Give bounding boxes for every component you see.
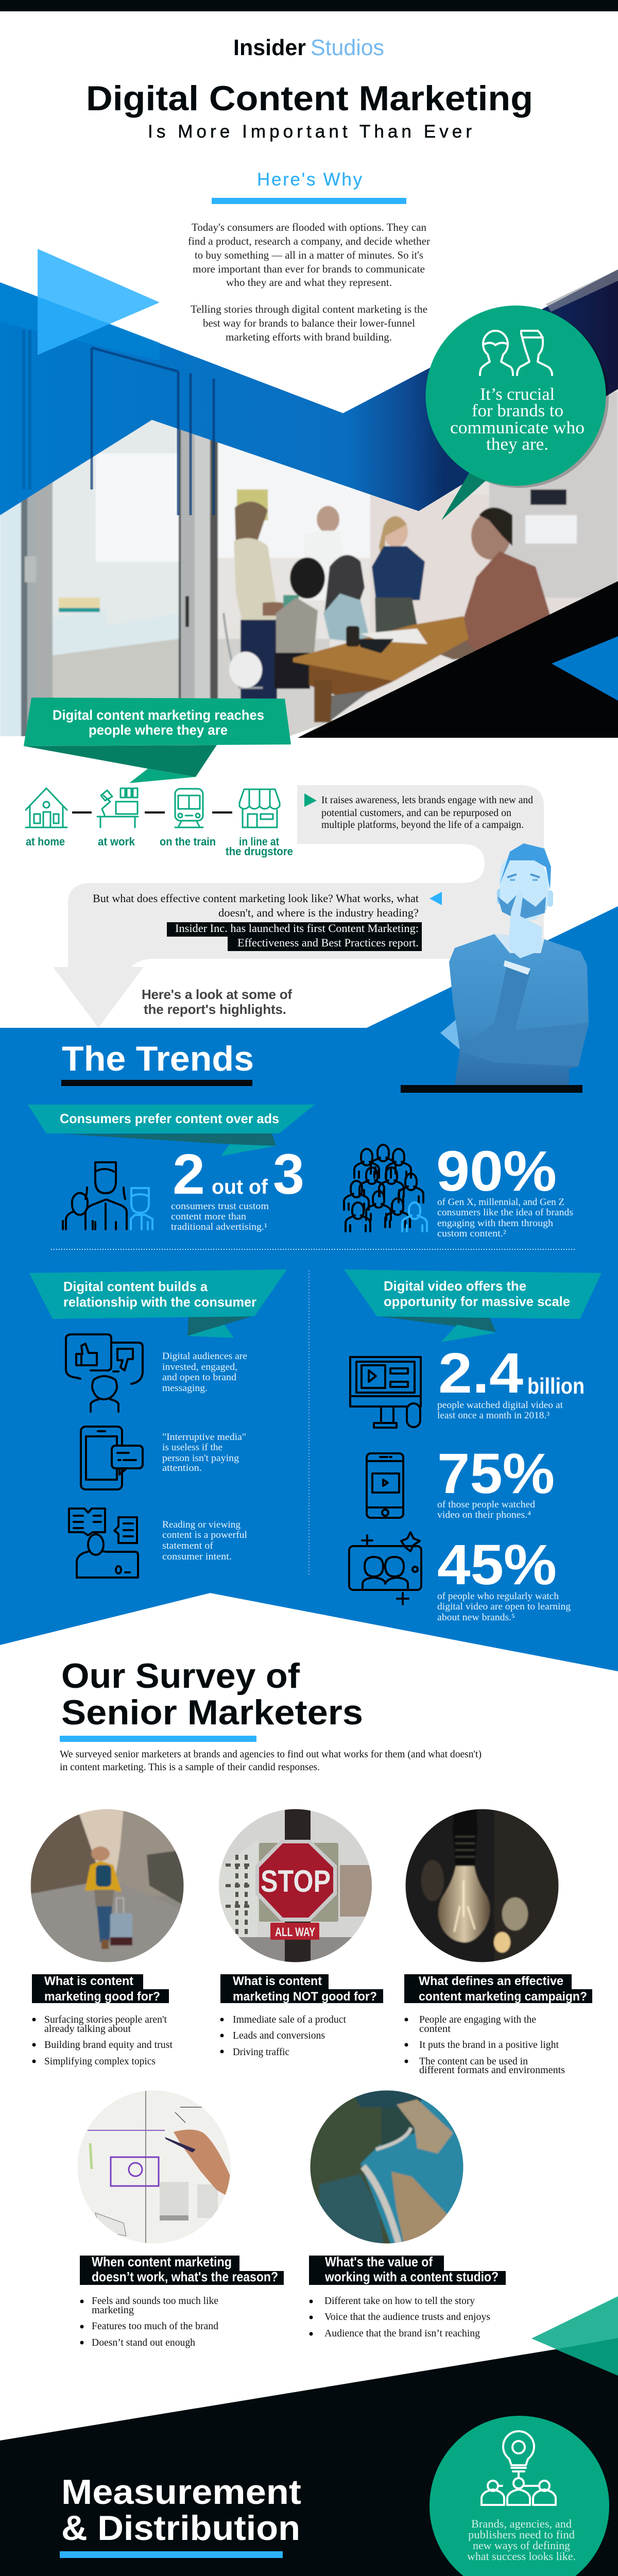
photo: thinking man in blue duotone	[440, 843, 589, 1086]
icon: monitor with video	[350, 1357, 421, 1428]
heading: Our Survey of Senior Marketers: Our Survey of	[61, 1656, 300, 1696]
heading: Our Survey of Senior Marketers	[60, 1656, 363, 1742]
icon: three consumers	[63, 1162, 152, 1229]
icon: train	[175, 789, 203, 827]
callout: what does effective content marketing look like: But what does effective content marketing look like? What works, what	[93, 892, 419, 905]
list	[405, 2014, 565, 2076]
hero photo: team meeting behind glass	[0, 291, 618, 736]
panel: Digital video offers scale: video on their phones.⁴	[437, 1510, 531, 1520]
icon: phone with message	[81, 1427, 143, 1489]
list: The content can be used in	[419, 2056, 528, 2067]
list: Feels and sounds too much like	[92, 2295, 218, 2307]
icon: desk	[97, 788, 138, 827]
list: Building brand equity and trust	[44, 2039, 173, 2050]
stat: 2 out of 3: traditional advertising.¹	[171, 1222, 267, 1232]
stat: 2 out of 3: 3	[273, 1143, 304, 1206]
question: What is content marketing NOT good for?	[220, 1974, 383, 2004]
light blue triangle	[38, 249, 160, 355]
ribbon	[344, 1269, 602, 1342]
icon: phone with video	[367, 1453, 403, 1518]
logo: Insider Studios: Insider	[233, 35, 306, 60]
question: What defines an effective campaign?: content marketing campaign?	[419, 1990, 587, 2004]
list: Different take on how to tell the story	[324, 2295, 475, 2307]
location labels: at work	[98, 835, 135, 848]
ribbon: opportunity for massive scale	[384, 1294, 570, 1309]
question: What defines an effective campaign?: What defines an effective	[419, 1974, 563, 1988]
callout: what does effective content marketing look like: Insider Inc. has launched its first Content Marketing:	[175, 922, 419, 935]
list: content	[419, 2023, 451, 2035]
black triangle, bottom right of hero	[298, 581, 618, 738]
photo: stop sign	[218, 1808, 373, 1963]
green speech bubble: new ways of defining success: what success looks like.	[467, 2550, 576, 2563]
list: Simplifying complex topics	[44, 2056, 156, 2067]
stat: 2 out of 3: content more than	[171, 1211, 247, 1222]
panel: Digital content builds a relationship: Digital audiences are	[162, 1351, 247, 1362]
panel: Digital video offers scale: 75%	[437, 1442, 555, 1505]
photo: whiteboard and hand	[77, 2090, 232, 2244]
list: different formats and environments	[419, 2064, 565, 2076]
icon: two people	[480, 331, 552, 375]
callout: raises awareness: It raises awareness, lets brands engage with new and	[321, 794, 533, 806]
photo: stop sign: ALL WAY	[275, 1925, 315, 1939]
text: report highlights: Here's a look at some of	[142, 987, 292, 1002]
panel: Digital content builds a relationship: content is a powerful	[162, 1530, 247, 1540]
shelf under man	[401, 1085, 582, 1093]
photo: coastal road	[309, 2090, 466, 2245]
logo: Insider Studios	[233, 35, 384, 60]
callout: what does effective content marketing look like: doesn't, and where is the industry heading?	[218, 906, 419, 919]
icon: house	[26, 788, 67, 827]
icon: crowd	[344, 1145, 427, 1231]
question: What is content marketing NOT good for?: What is content	[233, 1974, 322, 1988]
stat: 2 out of 3: consumers trust custom	[171, 1201, 269, 1212]
heading: Our Survey of Senior Marketers: Senior Marketers	[61, 1693, 363, 1732]
question: value of working with a content studio: What's the value of	[325, 2254, 433, 2269]
question: What is content marketing good for?: marketing good for?	[44, 1990, 160, 2004]
panel: Digital video offers scale: of those people watched	[437, 1499, 536, 1510]
panel: Digital video offers scale: about new brands.⁵	[437, 1612, 515, 1623]
logo: Insider Studios: Studios	[311, 35, 384, 60]
callout: raises awareness: potential customers, and can be repurposed on	[321, 807, 511, 819]
person: woman in beige shirt	[234, 502, 299, 700]
question: value of working with a content studio	[309, 2254, 506, 2285]
list: Surfacing stories people aren't	[44, 2014, 167, 2025]
list: Audience that the brand isn’t reaching	[324, 2328, 480, 2339]
person: seated woman, pale blue top	[323, 555, 371, 644]
intro copy: more important than ever for brands to communicate	[193, 263, 425, 275]
list: Features too much of the brand	[92, 2320, 218, 2332]
panel: Digital content builds a relationship: statement of	[162, 1540, 214, 1551]
list	[220, 2014, 346, 2058]
text: report highlights: the report's highlights.	[144, 1002, 286, 1017]
blue section background: The Trends	[0, 906, 618, 1671]
green speech bubble: It's crucial: communicate who	[450, 418, 585, 437]
photo: light bulb	[405, 1808, 559, 1963]
stat: 90%: custom content.²	[437, 1228, 506, 1239]
question: value of working with a content studio: working with a content studio?	[324, 2269, 499, 2284]
stat: 2 out of 3: out of	[212, 1176, 268, 1198]
panel: Digital video offers scale: 2.4	[438, 1342, 523, 1405]
icon: reader with book	[69, 1509, 138, 1578]
heading: Measurement & Distribution: & Distribution	[61, 2509, 300, 2548]
icon: storefront	[239, 789, 280, 827]
panel: Digital content builds a relationship: Reading or viewing	[162, 1519, 241, 1530]
list	[309, 2295, 490, 2339]
intro copy: find a product, research a company, and decide whether	[188, 235, 430, 247]
green speech bubble: new ways of defining success: new ways of defining	[473, 2539, 570, 2552]
panel: Digital content builds a relationship: consumer intent.	[162, 1551, 232, 1562]
intro copy: who they are and what they represent.	[226, 276, 392, 289]
intro copy: Today's consumers are flooded with options. They can	[192, 221, 426, 233]
stat: 90%: engaging with them through	[437, 1218, 554, 1229]
title: Digital Content Marketing	[86, 79, 533, 118]
person: man in plaid shirt	[440, 507, 551, 660]
intro copy	[188, 221, 430, 343]
list: People are engaging with the	[419, 2014, 536, 2025]
top black bar	[0, 0, 618, 11]
icon: selfie on phone	[349, 1532, 421, 1604]
stat: 90%: of Gen X, millennial, and Gen Z	[437, 1197, 564, 1208]
title	[86, 79, 533, 142]
panel: Digital video offers scale: of people who regularly watch	[437, 1591, 559, 1602]
heading: The Trends: The Trends	[62, 1039, 254, 1078]
heading: Here's Why	[212, 170, 406, 204]
question: What is content marketing good for?: What is content	[44, 1974, 133, 1988]
intro copy: best way for brands to balance their lower-funnel	[203, 317, 415, 329]
location labels: in line at	[239, 835, 280, 848]
photo: stop sign: STOP	[261, 1864, 331, 1899]
list: Driving traffic	[233, 2046, 289, 2058]
intro copy: Telling stories through digital content marketing is the	[191, 303, 427, 315]
panel: Digital content builds a relationship: and open to brand	[162, 1372, 237, 1383]
ribbon: Digital content marketing reaches people: people where they are	[89, 722, 228, 738]
callout: what does effective content marketing look like: Effectiveness and Best Practices report.	[237, 936, 419, 949]
stat: 90%: 90%	[436, 1140, 557, 1203]
chair	[224, 613, 263, 688]
person: man in white shirt	[304, 505, 340, 600]
dashes	[72, 811, 232, 814]
question: When content marketing doesn't work	[80, 2254, 284, 2285]
question: When content marketing doesn't work: doesn’t work, what's the reason?	[92, 2269, 278, 2284]
list: Voice that the audience trusts and enjoys	[324, 2311, 490, 2323]
stat: 2 out of 3	[63, 1143, 304, 1232]
heading: Measurement & Distribution	[60, 2472, 301, 2558]
question: What is content marketing NOT good for?: marketing NOT good for?	[233, 1990, 377, 2004]
ribbon: Digital video offers the	[384, 1278, 526, 1294]
panel: Digital content builds a relationship	[29, 1269, 287, 1578]
black section background: Measurement	[0, 2339, 618, 2576]
ribbon: Consumers prefer content over ads	[28, 1105, 315, 1156]
panel: Digital video offers scale	[344, 1269, 602, 1623]
intro copy: marketing efforts with brand building.	[226, 331, 392, 343]
list: Leads and conversions	[233, 2030, 325, 2041]
ribbon: Digital content marketing reaches people: Digital content marketing reaches	[53, 707, 264, 723]
person: standing woman in navy	[372, 516, 425, 639]
green speech bubble: new ways of defining success: publishers need to find	[468, 2528, 575, 2541]
green speech bubble: new ways of defining success	[430, 2416, 609, 2576]
white wedge at photo edge	[289, 725, 319, 738]
gray flow arrow	[53, 785, 544, 1028]
question: What defines an effective campaign?	[404, 1974, 592, 2004]
ribbon: relationship with the consumer	[63, 1294, 256, 1310]
green speech bubble: It's crucial: for brands to	[472, 401, 563, 420]
panel: Digital video offers scale: billion	[527, 1374, 585, 1399]
ribbon	[29, 1269, 287, 1338]
list: It puts the brand in a positive light	[419, 2039, 559, 2050]
stat: 90%	[344, 1140, 573, 1239]
callout: raises awareness: multiple platforms, beyond the life of a campaign.	[321, 819, 524, 831]
photo: traveler in alley	[30, 1808, 185, 1963]
survey intro: in content marketing. This is a sample of their candid responses.	[60, 1761, 320, 1773]
ribbon: Consumers prefer content over ads: Consumers prefer content over ads	[60, 1111, 279, 1126]
location labels	[26, 835, 293, 858]
meeting table	[293, 616, 469, 737]
ribbon: Digital content marketing reaches people	[24, 698, 291, 783]
callout: raises awareness	[304, 793, 533, 831]
question: When content marketing doesn't work: When content marketing	[92, 2254, 232, 2269]
panel: Digital content builds a relationship: is useless if the	[162, 1442, 222, 1453]
green speech bubble: new ways of defining success: Brands, agencies, and	[471, 2517, 572, 2530]
panel: Digital content builds a relationship: person isn't paying	[162, 1453, 239, 1464]
stat: 2 out of 3: 2	[173, 1143, 205, 1206]
icon row: where people are	[26, 788, 293, 858]
panel: Digital content builds a relationship: messaging.	[162, 1383, 208, 1394]
callout: what does effective content marketing look like	[93, 892, 442, 951]
list	[32, 2014, 173, 2067]
survey intro: We surveyed senior marketers at brands and agencies to find out what works for them (and what doesn't)	[60, 1749, 482, 1760]
panel: Digital video offers scale: digital video are open to learning	[437, 1601, 571, 1612]
heading: Measurement & Distribution: Measurement	[61, 2472, 301, 2512]
list: marketing	[92, 2304, 134, 2316]
panel: Digital video offers scale: 45%	[437, 1533, 557, 1597]
list	[80, 2295, 218, 2348]
panel: Digital video offers scale: least once a month in 2018.³	[437, 1410, 550, 1421]
green speech bubble: It's crucial: they are.	[486, 435, 548, 454]
green speech bubble: It's crucial: It’s crucial	[480, 385, 555, 404]
list: Immediate sale of a product	[233, 2014, 346, 2025]
list: Doesn’t stand out enough	[92, 2337, 195, 2348]
icon: bulb and connected people	[482, 2431, 556, 2505]
location labels: at home	[26, 835, 65, 848]
panel: Digital content builds a relationship: "Interruptive media"	[162, 1432, 246, 1443]
location labels: the drugstore	[226, 845, 293, 858]
panel: Digital video offers scale: people watched digital video at	[437, 1400, 563, 1411]
green speech bubble: It's crucial	[425, 306, 609, 520]
blue chevron overlay	[0, 269, 618, 515]
stat: 90%: consumers like the idea of brands	[437, 1207, 573, 1218]
blue triangle accent	[552, 636, 618, 701]
panel: Digital content builds a relationship: attention.	[162, 1463, 202, 1473]
icon: likes and dislikes	[66, 1334, 143, 1412]
ribbon: Digital content builds a	[63, 1279, 208, 1294]
person: seated woman, spotted blouse	[274, 557, 325, 689]
intro copy: to buy something — all in a matter of minutes. So it's	[195, 249, 423, 261]
survey intro	[60, 1749, 482, 1773]
list: already talking about	[44, 2023, 131, 2035]
title: Is More Important Than Ever	[148, 122, 472, 142]
location labels: on the train	[160, 835, 216, 848]
green triangle accent	[531, 2296, 618, 2376]
text: report highlights	[142, 987, 292, 1017]
heading: Here's Why: Here's Why	[257, 170, 363, 190]
panel: Digital content builds a relationship: invested, engaged,	[162, 1362, 237, 1372]
question: What is content marketing good for?	[32, 1974, 169, 2004]
